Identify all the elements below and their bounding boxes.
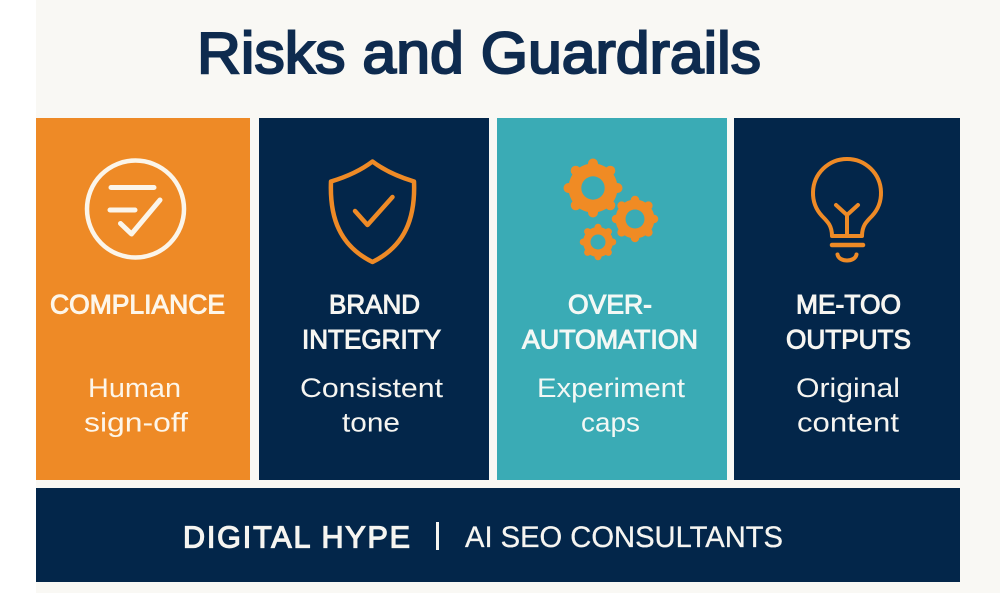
brand integrity background [259, 118, 489, 480]
over-automation background [497, 118, 727, 480]
icon: gears [568, 164, 654, 257]
footer background [36, 488, 960, 582]
compliance background [36, 118, 250, 480]
me-too outputs heading: ME-TOO [796, 290, 901, 320]
brand integrity heading: BRAND [329, 290, 420, 320]
footer tagline: AI SEO CONSULTANTS [465, 521, 783, 554]
me-too outputs guardrail [796, 373, 900, 438]
brand integrity guardrail [300, 373, 444, 438]
title: Risks and Guardrails [197, 21, 761, 86]
over-automation heading [522, 290, 698, 354]
footer separator [436, 522, 439, 550]
compliance guardrail [84, 373, 189, 438]
over-automation heading: AUTOMATION [522, 324, 698, 354]
icon: checklist in circle [87, 160, 184, 258]
me-too outputs guardrail: content [797, 408, 900, 438]
brand integrity heading [302, 290, 441, 354]
me-too outputs heading [786, 290, 911, 354]
compliance heading: COMPLIANCE [50, 290, 225, 320]
me-too outputs guardrail: Original [796, 373, 900, 403]
panel: brand integrity [259, 118, 489, 480]
me-too outputs heading: OUTPUTS [786, 324, 911, 354]
compliance guardrail: Human [88, 373, 181, 403]
compliance guardrail: sign-off [84, 408, 189, 438]
brand integrity guardrail: tone [342, 408, 400, 438]
panel: me-too outputs [734, 118, 960, 480]
brand integrity heading: INTEGRITY [302, 324, 441, 354]
icon: shield with check [331, 162, 414, 262]
over-automation heading: OVER- [568, 290, 652, 320]
brand integrity guardrail: Consistent [300, 373, 444, 403]
panel: over-automation [497, 118, 727, 480]
icon: light bulb [813, 159, 881, 260]
panel: compliance [36, 118, 250, 480]
over-automation guardrail: caps [581, 408, 640, 438]
over-automation guardrail [537, 373, 686, 438]
over-automation guardrail: Experiment [537, 373, 686, 403]
footer brand name: DIGITAL HYPE [183, 520, 410, 554]
me-too outputs background [734, 118, 960, 480]
footer banner [36, 488, 960, 582]
